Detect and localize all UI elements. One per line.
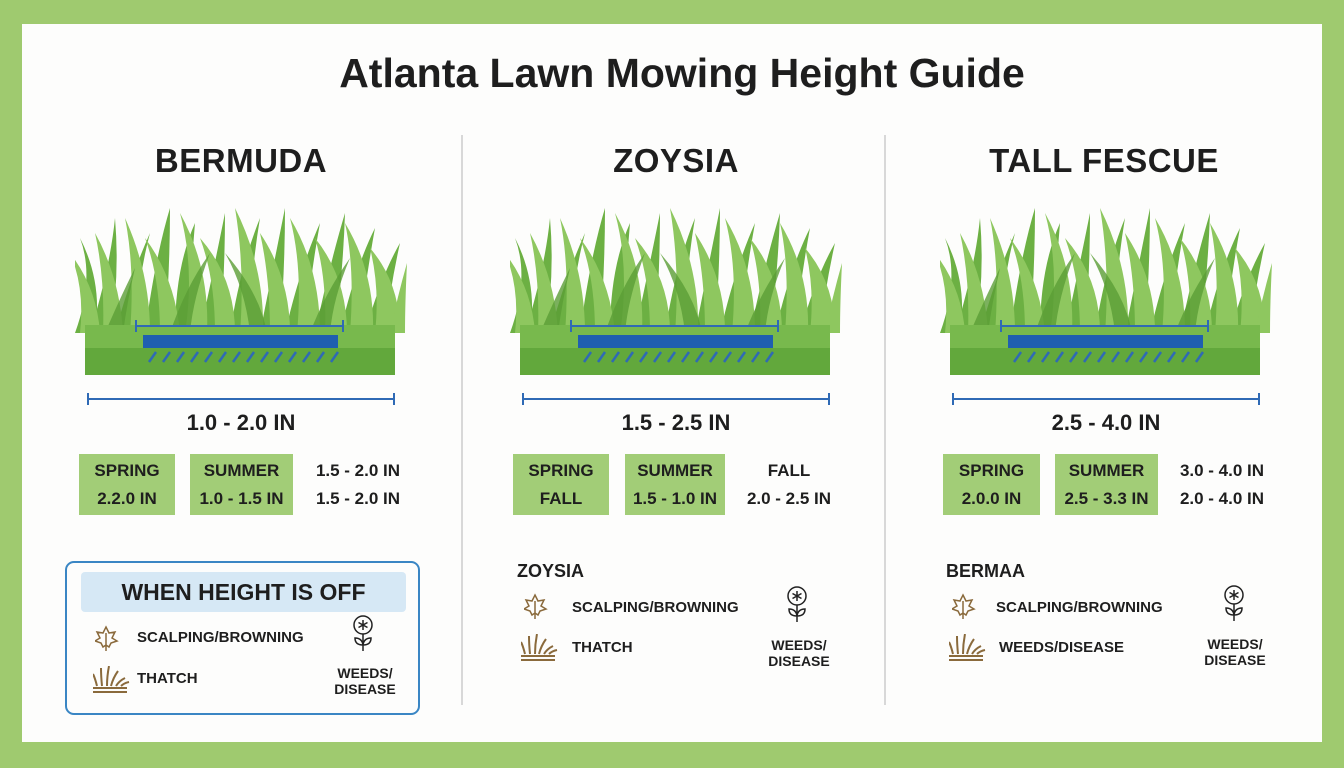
illustration: grass with mower height [75,208,407,405]
icon: flower [787,586,807,622]
season box: summer: SUMMER [637,461,713,480]
text: weeds: DISEASE [334,681,396,697]
season box: spring/fall: FALL [540,489,582,508]
subheading: BERMAA [946,561,1025,581]
text: thatch: THATCH [572,639,633,656]
season text: 2.0 - 4.0 IN [1180,489,1264,508]
heading: zoysia: ZOYSIA [613,142,739,179]
title: Atlanta Lawn Mowing Height Guide [339,50,1025,96]
season text [747,461,831,508]
icon: thatch [521,634,558,661]
season box: spring/fall [513,454,609,515]
icon: flower [353,615,373,651]
text: scalping: SCALPING/BROWNING [572,599,739,616]
text: weeds: DISEASE [1204,652,1266,668]
season box: summer [190,454,293,515]
text: scalping: SCALPING/BROWNING [996,599,1163,616]
text: weeds: WEEDS/ [1207,636,1263,652]
season box: spring: SPRING [959,461,1024,480]
season box: summer [625,454,725,515]
season box: summer: 1.0 - 1.5 IN [199,489,284,508]
season box: summer [1055,454,1158,515]
panel: bermuda [65,142,420,715]
season text: fall: 1.5 - 2.0 IN [316,489,400,508]
text: weeds: WEEDS/ [771,637,827,653]
season text: 3.0 - 4.0 IN [1180,461,1264,480]
range: tall fescue: 2.5 - 4.0 IN [1052,410,1160,435]
season box: spring: 2.2.0 IN [97,489,157,508]
text: weeds/disease: WEEDS/DISEASE [999,639,1124,656]
subheading: ZOYSIA [517,561,584,581]
heading: tall fescue: TALL FESCUE [989,142,1219,179]
season box: spring: 2.0.0 IN [962,489,1021,508]
icon: thatch [93,666,130,693]
text: weeds [768,637,830,669]
season text [1180,461,1264,508]
season text: fall [316,461,400,508]
icon: leaf [95,626,119,651]
callout heading: WHEN HEIGHT IS OFF [121,579,366,605]
illustration: grass [940,208,1272,405]
season box: summer: 2.5 - 3.3 IN [1064,489,1149,508]
icon: flower [1224,585,1244,621]
season box: spring: SPRING [94,461,160,480]
season box: spring/fall: SPRING [528,461,594,480]
season box: summer: SUMMER [1069,461,1144,480]
season box: spring [79,454,175,515]
icon: thatch [949,634,986,661]
text: weeds [334,665,396,697]
heading: bermuda: BERMUDA [155,142,327,179]
text: scalping: SCALPING/BROWNING [137,629,304,646]
text: weeds: DISEASE [768,653,830,669]
season box: spring [943,454,1040,515]
season text: FALL [768,461,810,480]
illustration: grass [510,208,842,405]
season box: summer: SUMMER [204,461,279,480]
icon: leaf [952,594,976,619]
range: zoysia: 1.5 - 2.5 IN [622,410,730,435]
text: thatch: THATCH [137,670,198,687]
season text: fall: 1.5 - 2.0 IN [316,461,400,480]
callout heading [81,572,406,612]
text: weeds: WEEDS/ [337,665,393,681]
icon: leaf [524,594,548,619]
season text: 2.0 - 2.5 IN [747,489,831,508]
text: weeds [1204,636,1266,668]
panel: zoysia [510,142,842,669]
season box: summer: 1.5 - 1.0 IN [633,489,717,508]
range: bermuda: 1.0 - 2.0 IN [187,410,295,435]
panel: tall fescue [940,142,1272,668]
callout: when height is off [65,561,420,715]
